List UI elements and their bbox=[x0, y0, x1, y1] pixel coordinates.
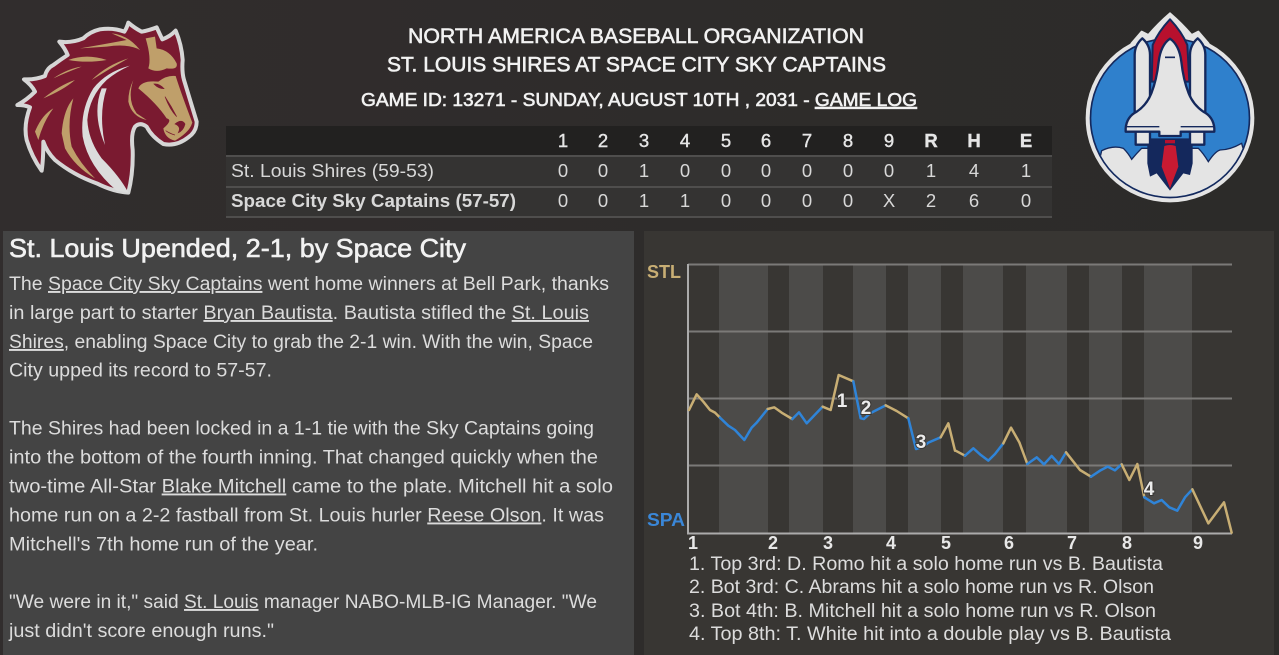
article paragraph 1: The Space City Sky Captains went home winners at Bell Park, thanks bbox=[9, 274, 609, 295]
table row: Space City Sky Captains: 0 bbox=[802, 190, 812, 211]
table row: Space City Sky Captains: 0 bbox=[558, 190, 568, 211]
table header row: E bbox=[1020, 130, 1032, 151]
article paragraph 1: Shires, enabling Space City to grab the 2-1 win. With the win, Space bbox=[9, 332, 593, 353]
table row: St. Louis Shires: 0 bbox=[680, 160, 690, 181]
table row: St. Louis Shires: 4 bbox=[969, 160, 979, 181]
table row: St. Louis Shires: 0 bbox=[558, 160, 568, 181]
table row: Space City Sky Captains: 1 bbox=[639, 190, 649, 211]
rocket fuel tank bbox=[1152, 19, 1189, 82]
key plays list: 1. Top 3rd: D. Romo hit a solo home run vs B. Bautista bbox=[689, 554, 1163, 575]
article headline: St. Louis Upended, 2-1, by Space City bbox=[9, 233, 466, 263]
table row: St. Louis Shires: 1 bbox=[1021, 160, 1031, 181]
key plays list: 2. Bot 3rd: C. Abrams hit a solo home run vs R. Olson bbox=[689, 577, 1154, 598]
article paragraph 2: Mitchell's 7th home run of the year. bbox=[9, 534, 318, 556]
panel: game recap article bbox=[3, 231, 634, 655]
team label: SPA: SPA bbox=[647, 509, 685, 530]
article paragraph 2 bbox=[9, 418, 613, 556]
article paragraph 1 bbox=[9, 274, 609, 382]
table row: St. Louis Shires: 0 bbox=[802, 160, 812, 181]
key plays list: 4. Top 8th: T. White hit into a double play vs B. Bautista bbox=[689, 624, 1171, 645]
line score table bbox=[226, 126, 1052, 218]
panel: win probability chart bbox=[644, 231, 1274, 655]
inning axis labels: 1 bbox=[688, 533, 698, 553]
table row: St. Louis Shires: 1 bbox=[639, 160, 649, 181]
table row: Space City Sky Captains: 2 bbox=[926, 190, 936, 211]
table header row: 1 bbox=[558, 130, 568, 151]
article paragraph 1: City upped its record to 57-57. bbox=[9, 360, 272, 382]
event markers: 2 bbox=[861, 398, 871, 419]
table header row: H bbox=[967, 130, 981, 151]
table header row: 2 bbox=[598, 130, 608, 151]
inning axis labels: 4 bbox=[886, 533, 896, 553]
table row: Space City Sky Captains bbox=[231, 190, 1031, 211]
inning axis labels: 6 bbox=[1004, 533, 1014, 553]
article paragraph 3: just didn't score enough runs." bbox=[8, 621, 274, 642]
article paragraph 2: home run on a 2-2 fastball from St. Louis hurler Reese Olson. It was bbox=[9, 506, 604, 526]
table row: Space City Sky Captains: X bbox=[883, 190, 895, 211]
inning axis labels bbox=[688, 533, 1203, 553]
inning axis labels: 2 bbox=[768, 533, 778, 553]
heading: league and matchup title: NORTH AMERICA BASEBALL ORGANIZATION bbox=[408, 24, 864, 48]
inning bands bbox=[719, 265, 1192, 533]
table row: Space City Sky Captains: 0 bbox=[721, 190, 731, 211]
article paragraph 2: The Shires had been locked in a 1-1 tie with the Sky Captains going bbox=[9, 418, 594, 440]
event markers: 4 bbox=[1144, 479, 1155, 500]
table header row: 7 bbox=[802, 130, 812, 151]
table row: Space City Sky Captains: 1 bbox=[680, 190, 690, 211]
inning axis labels: 9 bbox=[1193, 533, 1203, 553]
article paragraph 3 bbox=[8, 592, 597, 642]
key plays list: 3. Bot 4th: B. Mitchell hit a solo home run vs R. Olson bbox=[689, 601, 1156, 622]
key plays list bbox=[689, 554, 1171, 645]
table row: St. Louis Shires: 0 bbox=[721, 160, 731, 181]
article paragraph 2: two-time All-Star Blake Mitchell came to the plate. Mitchell hit a solo bbox=[9, 476, 613, 498]
inning axis labels: 3 bbox=[823, 533, 833, 553]
event markers: 3 bbox=[916, 432, 926, 453]
table row: Space City Sky Captains: 0 bbox=[598, 190, 608, 211]
table row: St. Louis Shires: 0 bbox=[843, 160, 853, 181]
inning axis labels: 7 bbox=[1067, 533, 1077, 553]
rocket flame bbox=[1147, 138, 1193, 191]
table row: St. Louis Shires: St. Louis Shires (59-53) bbox=[231, 160, 434, 181]
table row: St. Louis Shires: 1 bbox=[926, 160, 936, 181]
table row: Space City Sky Captains: 6 bbox=[969, 190, 979, 211]
table row: Space City Sky Captains: 0 bbox=[1021, 190, 1031, 211]
table header row: 3 bbox=[639, 130, 649, 151]
table header row bbox=[558, 130, 1032, 151]
win probability line bbox=[689, 375, 1232, 533]
table header row: R bbox=[924, 130, 938, 151]
team label: STL: STL bbox=[647, 261, 681, 282]
table header row: 9 bbox=[884, 130, 894, 151]
inning axis labels: 5 bbox=[941, 533, 951, 553]
heading: league and matchup title: GAME ID: 13271 - SUNDAY, AUGUST 10TH , 2031 - GAME LOG bbox=[361, 89, 917, 110]
article paragraph 1: in large part to starter Bryan Bautista . Bautista stifled the St. Louis bbox=[9, 303, 589, 324]
inning axis labels: 8 bbox=[1122, 533, 1132, 553]
article paragraph 3: "We were in it," said St. Louis manager NABO-MLB-IG Manager. "We bbox=[9, 592, 597, 613]
table row: Space City Sky Captains: 0 bbox=[843, 190, 853, 211]
event markers bbox=[837, 391, 1155, 500]
article paragraph 2: into the bottom of the fourth inning. That changed quickly when the bbox=[9, 448, 598, 468]
table row: St. Louis Shires: 0 bbox=[598, 160, 608, 181]
table row: St. Louis Shires: 0 bbox=[761, 160, 771, 181]
table row: Space City Sky Captains: 0 bbox=[761, 190, 771, 211]
table header row: 8 bbox=[843, 130, 853, 151]
table row: St. Louis Shires bbox=[231, 160, 1031, 181]
table header row: 6 bbox=[761, 130, 771, 151]
table row: Space City Sky Captains: Space City Sky Captains (57-57) bbox=[231, 190, 516, 211]
logo: St. Louis Shires horse head bbox=[17, 23, 197, 193]
table header row: 5 bbox=[721, 130, 731, 151]
event markers: 1 bbox=[837, 391, 848, 412]
table header row: 4 bbox=[680, 130, 690, 151]
heading: league and matchup title: ST. LOUIS SHIRES AT SPACE CITY SKY CAPTAINS bbox=[387, 52, 886, 76]
heading: league and matchup title bbox=[361, 24, 917, 110]
logo: Space City Sky Captains rocket bbox=[1086, 13, 1257, 202]
table row: St. Louis Shires: 0 bbox=[884, 160, 894, 181]
